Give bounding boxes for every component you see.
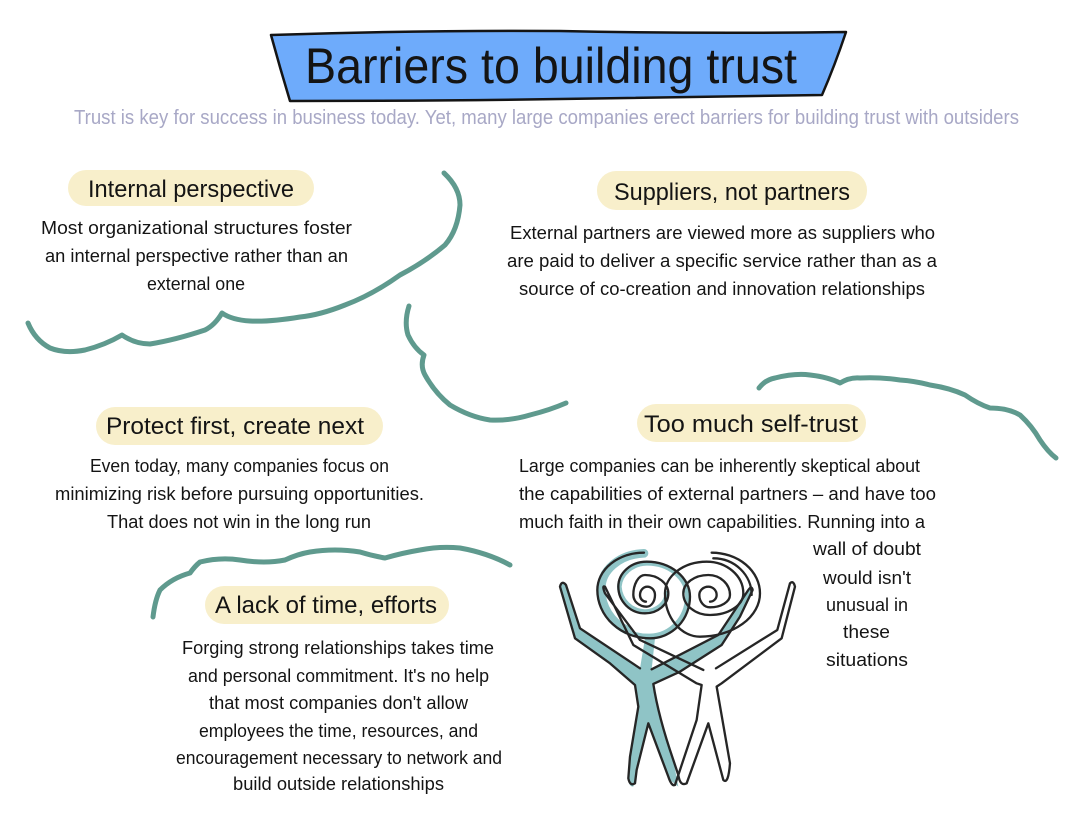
- right spiral outline: [665, 553, 760, 637]
- body text: that most companies don't allow: [209, 693, 469, 713]
- curve: lack of time: [153, 547, 510, 617]
- body text: wall of doubt: [812, 539, 921, 559]
- body text: an internal perspective rather than an: [45, 246, 348, 266]
- heading pill: [205, 586, 449, 624]
- teal spiral lower band: [619, 563, 687, 636]
- subtitle: Trust is key for success in business today. Yet, many large companies erect barriers for building trust with outsiders: [74, 107, 1019, 129]
- title banner: [271, 31, 846, 101]
- body text: employees the time, resources, and: [199, 721, 478, 741]
- heading: Suppliers, not partners: [614, 179, 850, 206]
- body text: [507, 223, 938, 299]
- body text: [41, 218, 352, 294]
- body text: [519, 456, 936, 670]
- body text: encouragement necessary to network and: [176, 748, 502, 768]
- panel: protect first, create next: [55, 407, 424, 532]
- body text: and personal commitment. It's no help: [188, 666, 489, 686]
- heading pill: [597, 171, 867, 210]
- left spiral outline: [597, 553, 690, 638]
- right figure outline: [603, 582, 795, 784]
- curve: center: [406, 306, 566, 420]
- body text: unusual in: [826, 595, 908, 615]
- heading pill: [68, 170, 314, 206]
- panel: internal perspective: [41, 170, 352, 294]
- heading: A lack of time, efforts: [215, 592, 437, 619]
- heading pill: [96, 407, 383, 445]
- banner shape: [271, 31, 846, 101]
- heading: Internal perspective: [88, 176, 294, 203]
- body text: That does not win in the long run: [107, 512, 371, 532]
- body text: External partners are viewed more as suppliers who: [510, 223, 935, 243]
- teal figure fill: [560, 583, 753, 787]
- body text: these: [843, 622, 890, 642]
- body text: Even today, many companies focus on: [90, 456, 389, 476]
- heading: Protect first, create next: [106, 413, 364, 440]
- right spiral second arc: [713, 558, 752, 595]
- curve: internal perspective: [28, 173, 460, 352]
- curve: too much self-trust: [759, 374, 1056, 458]
- body text: much faith in their own capabilities. Running into a: [519, 512, 926, 532]
- body text: [55, 456, 424, 532]
- heading pill: [637, 404, 866, 442]
- body text: build outside relationships: [233, 774, 444, 794]
- body text: would isn't: [822, 568, 911, 588]
- body text: source of co-creation and innovation relationships: [519, 279, 925, 299]
- heading: Too much self-trust: [644, 411, 858, 438]
- body text: minimizing risk before pursuing opportunities.: [55, 484, 424, 504]
- panel: a lack of time, efforts: [176, 586, 502, 794]
- left figure outline: [560, 583, 753, 785]
- teal spiral band: [601, 553, 644, 630]
- body text: are paid to deliver a specific service rather than as a: [507, 251, 938, 271]
- body text: Forging strong relationships takes time: [182, 638, 494, 658]
- panel: too much self-trust: [519, 404, 936, 670]
- body text: situations: [826, 650, 908, 670]
- body text: the capabilities of external partners – and have too: [519, 484, 936, 504]
- body text: Large companies can be inherently skeptical about: [519, 456, 920, 476]
- body text: Most organizational structures foster: [41, 218, 352, 238]
- body text: external one: [147, 274, 245, 294]
- illustration: two figures with spiral heads forming a heart: [560, 553, 795, 787]
- panel: suppliers, not partners: [507, 171, 938, 299]
- title text: Barriers to building trust: [305, 38, 797, 94]
- body text: [176, 638, 502, 794]
